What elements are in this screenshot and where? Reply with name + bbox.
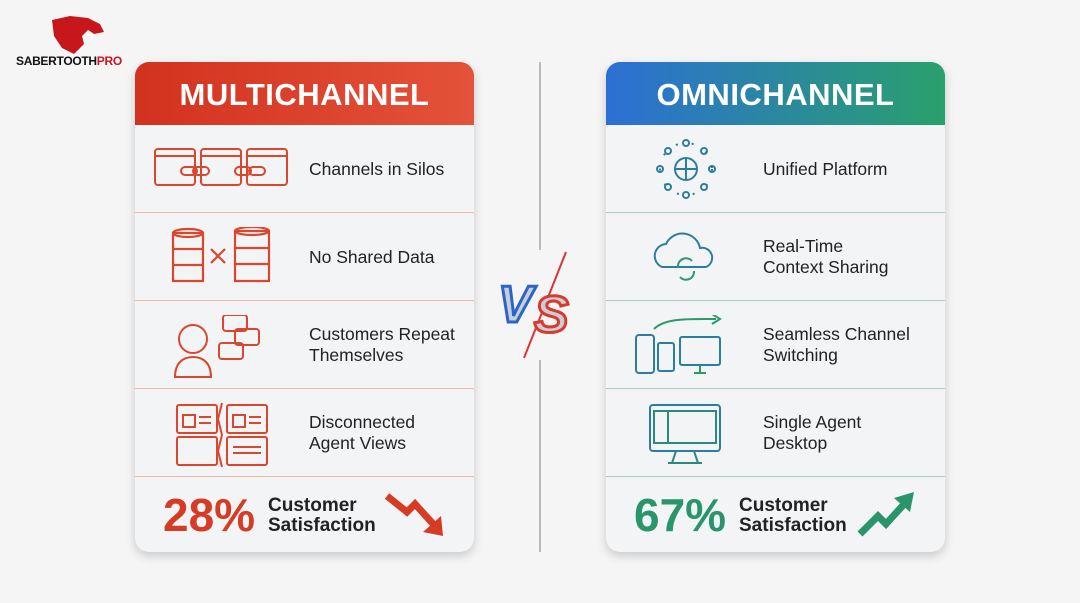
row: customers repeat themselves: Themselves: [309, 345, 403, 365]
row: real-time context sharing: Real-Time: [763, 236, 843, 256]
stat: 67%: Customer: [739, 495, 828, 516]
logo: [16, 16, 122, 68]
divider line: [539, 62, 541, 552]
panel: omnichannel: [606, 62, 945, 552]
row: channels in silos: [135, 125, 474, 213]
VS badge: [496, 250, 586, 360]
row: seamless channel switching: Switching: [763, 345, 838, 365]
VS badge: V: [498, 276, 537, 334]
icon: down arrow: [385, 493, 443, 536]
row: single agent desktop: [606, 389, 945, 477]
VS badge: S: [534, 286, 569, 344]
row: unified platform: Unified Platform: [763, 158, 888, 178]
row: disconnected agent views: Disconnected: [309, 412, 415, 432]
row: no shared data: No Shared Data: [309, 246, 434, 266]
heading: multichannel: [135, 62, 474, 125]
row: unified platform: [606, 125, 945, 213]
row: seamless channel switching: Seamless Channel: [763, 324, 910, 344]
row: seamless channel switching: [606, 301, 945, 389]
stat: 28%: 28%: [163, 489, 255, 541]
stat: 67%: [634, 489, 914, 541]
stat: 28%: Customer: [268, 495, 357, 516]
row: real-time context sharing: [606, 213, 945, 301]
row: channels in silos: Channels in Silos: [309, 158, 444, 178]
row: disconnected agent views: Agent Views: [309, 433, 406, 453]
row: single agent desktop: Single Agent: [763, 412, 861, 432]
row: no shared data: [135, 213, 474, 301]
row: single agent desktop: Desktop: [763, 433, 827, 453]
heading: multichannel: MULTICHANNEL: [180, 77, 429, 112]
heading: omnichannel: OMNICHANNEL: [656, 77, 894, 112]
logo: SABERTOOTHPRO: [16, 54, 122, 68]
row: customers repeat themselves: [135, 301, 474, 389]
stat: 67%: Satisfaction: [739, 515, 847, 536]
stat: 28%: [163, 489, 443, 541]
stat: 28%: Satisfaction: [268, 515, 376, 536]
stat: 67%: 67%: [634, 489, 726, 541]
heading: omnichannel: [606, 62, 945, 125]
icon: up arrow: [858, 492, 914, 536]
row: disconnected agent views: [135, 389, 474, 477]
row: real-time context sharing: Context Sharing: [763, 257, 888, 277]
panel: multichannel: [135, 62, 474, 552]
row: customers repeat themselves: Customers Repeat: [309, 324, 455, 344]
